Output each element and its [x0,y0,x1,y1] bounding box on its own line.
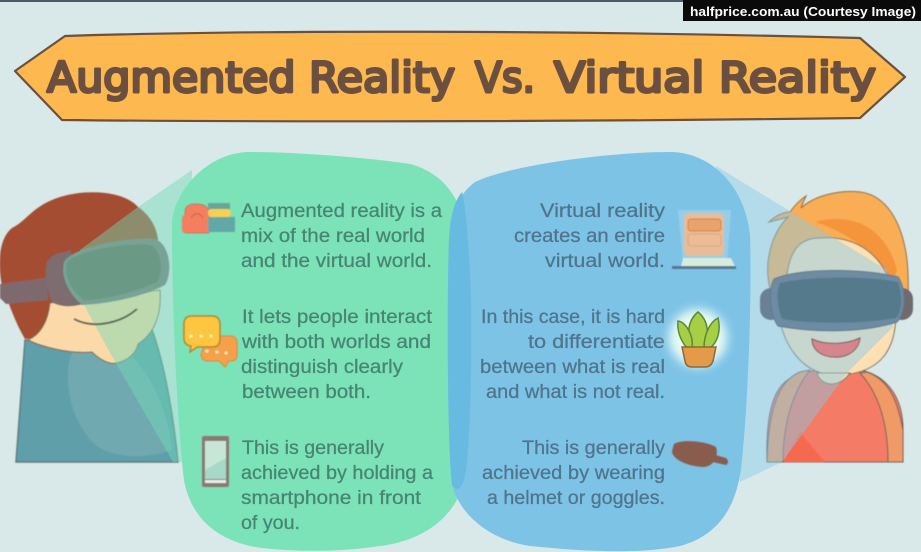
title: Augmented Reality [47,53,455,102]
right goggles [760,270,913,357]
hair [0,192,158,339]
augmented reality text: and the virtual world. [241,250,432,272]
virtual reality text: This is generally [522,437,665,459]
augmented reality text: It lets people interact [242,306,433,328]
mouth [812,338,860,357]
virtual reality text [480,200,665,509]
virtual reality text: a helmet or goggles. [487,487,665,509]
icon: helmet [672,441,728,467]
augmented reality text: achieved by holding a [241,462,433,484]
augmented reality text: Augmented reality is a [241,200,442,222]
augmented reality text [241,200,442,534]
title banner [15,32,905,121]
icon: hologram chest of drawers [672,210,736,269]
virtual reality text: between what is real [480,356,665,378]
body [16,330,178,462]
goggles side [46,250,90,306]
body [767,370,903,462]
icon: speech bubbles [184,316,237,367]
virtual reality text: Virtual reality [540,200,665,222]
title: Vs. [475,53,535,102]
virtual reality text: and what is not real. [486,381,665,403]
smile [74,309,137,324]
title [47,53,876,102]
virtual reality text: to differentiate [528,331,665,353]
right character [767,192,908,462]
icon: plant [669,309,727,367]
augmented reality text: smartphone in front [241,487,422,509]
augmented reality text: between both. [242,381,371,403]
title: Virtual Reality [554,53,876,102]
panel: augmented reality [172,152,470,551]
augmented reality text: of you. [241,512,300,534]
beam: left [80,170,192,462]
virtual reality text: achieved by wearing [482,462,665,484]
headset strap [0,278,48,304]
face [28,290,160,363]
source credit [683,0,921,21]
augmented reality text: distinguish clearly [241,356,403,378]
panel: virtual reality [448,152,751,551]
icon: smartphone [202,436,229,487]
left goggles lens [63,238,169,324]
hair [768,192,908,300]
source credit: halfprice.com.au (Courtesy Image) [690,5,916,19]
virtual reality text: In this case, it is hard [481,306,665,328]
augmented reality text: mix of the real world [241,225,425,247]
virtual reality text: virtual world. [545,250,665,272]
left character [0,192,178,462]
face [778,238,896,375]
virtual reality text: creates an entire [514,225,665,247]
icon: sofa [182,203,235,233]
augmented reality text: with both worlds and [241,331,431,353]
panel overlap [448,192,471,489]
augmented reality text: This is generally [242,437,384,459]
beam: right [716,166,893,482]
